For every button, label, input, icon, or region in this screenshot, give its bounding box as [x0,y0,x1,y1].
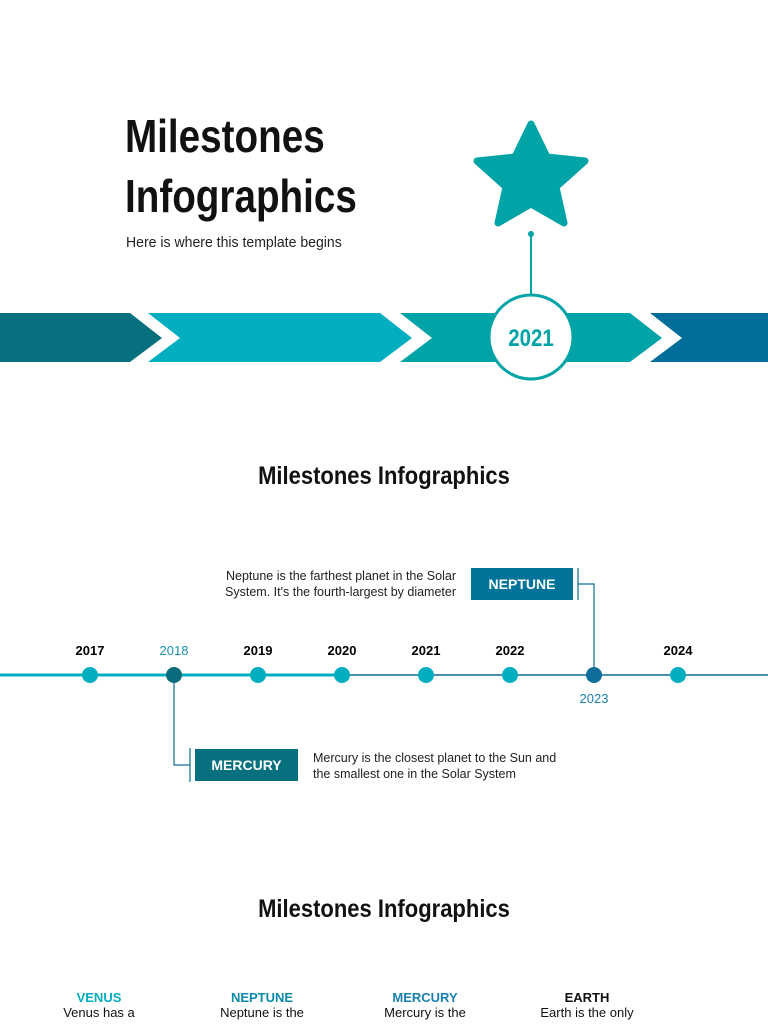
timeline: 2021 [412,643,440,658]
bottom columns [63,990,634,1020]
timeline: 2023 [580,691,608,706]
bottom columns: Mercury is the [384,1005,466,1020]
timeline: 2019 [244,643,272,658]
mercury text: the smallest one in the Solar System [313,767,516,781]
title: Milestones [125,110,325,162]
neptune text: Neptune is the farthest planet in the Solar System. It's the fourth-largest by diameter [225,569,456,599]
mercury text [313,751,556,781]
bottom columns: Neptune is the [220,1005,304,1020]
label: mercury: MERCURY [211,757,282,773]
title: Infographics [125,170,357,222]
timeline: 2020 [328,643,356,658]
bottom columns: MERCURY [392,990,458,1005]
year circle: 2021 [508,324,554,351]
heading 3: Milestones Infographics [258,895,510,923]
bottom columns: Venus has a [63,1005,135,1020]
timeline: 2018 [160,643,188,658]
title [125,110,357,222]
subtitle: Here is where this template begins [126,235,342,251]
year circle [489,295,573,379]
bottom columns: VENUS [77,990,121,1005]
icon: star [477,124,585,223]
bottom columns: EARTH [565,990,609,1005]
timeline: 2024 [664,643,693,658]
bottom columns: Earth is the only [540,1005,634,1020]
label: mercury [195,749,298,781]
timeline [0,568,768,782]
chevron band with star and year [0,120,768,380]
timeline: 2022 [496,643,524,658]
bottom columns: NEPTUNE [231,990,293,1005]
label: neptune: NEPTUNE [489,576,555,592]
connector lines [174,675,190,765]
timeline: 2017 [76,643,104,658]
heading 2: Milestones Infographics [258,462,510,490]
label: neptune [471,568,573,600]
mercury text: Mercury is the closest planet to the Sun and [313,751,556,765]
